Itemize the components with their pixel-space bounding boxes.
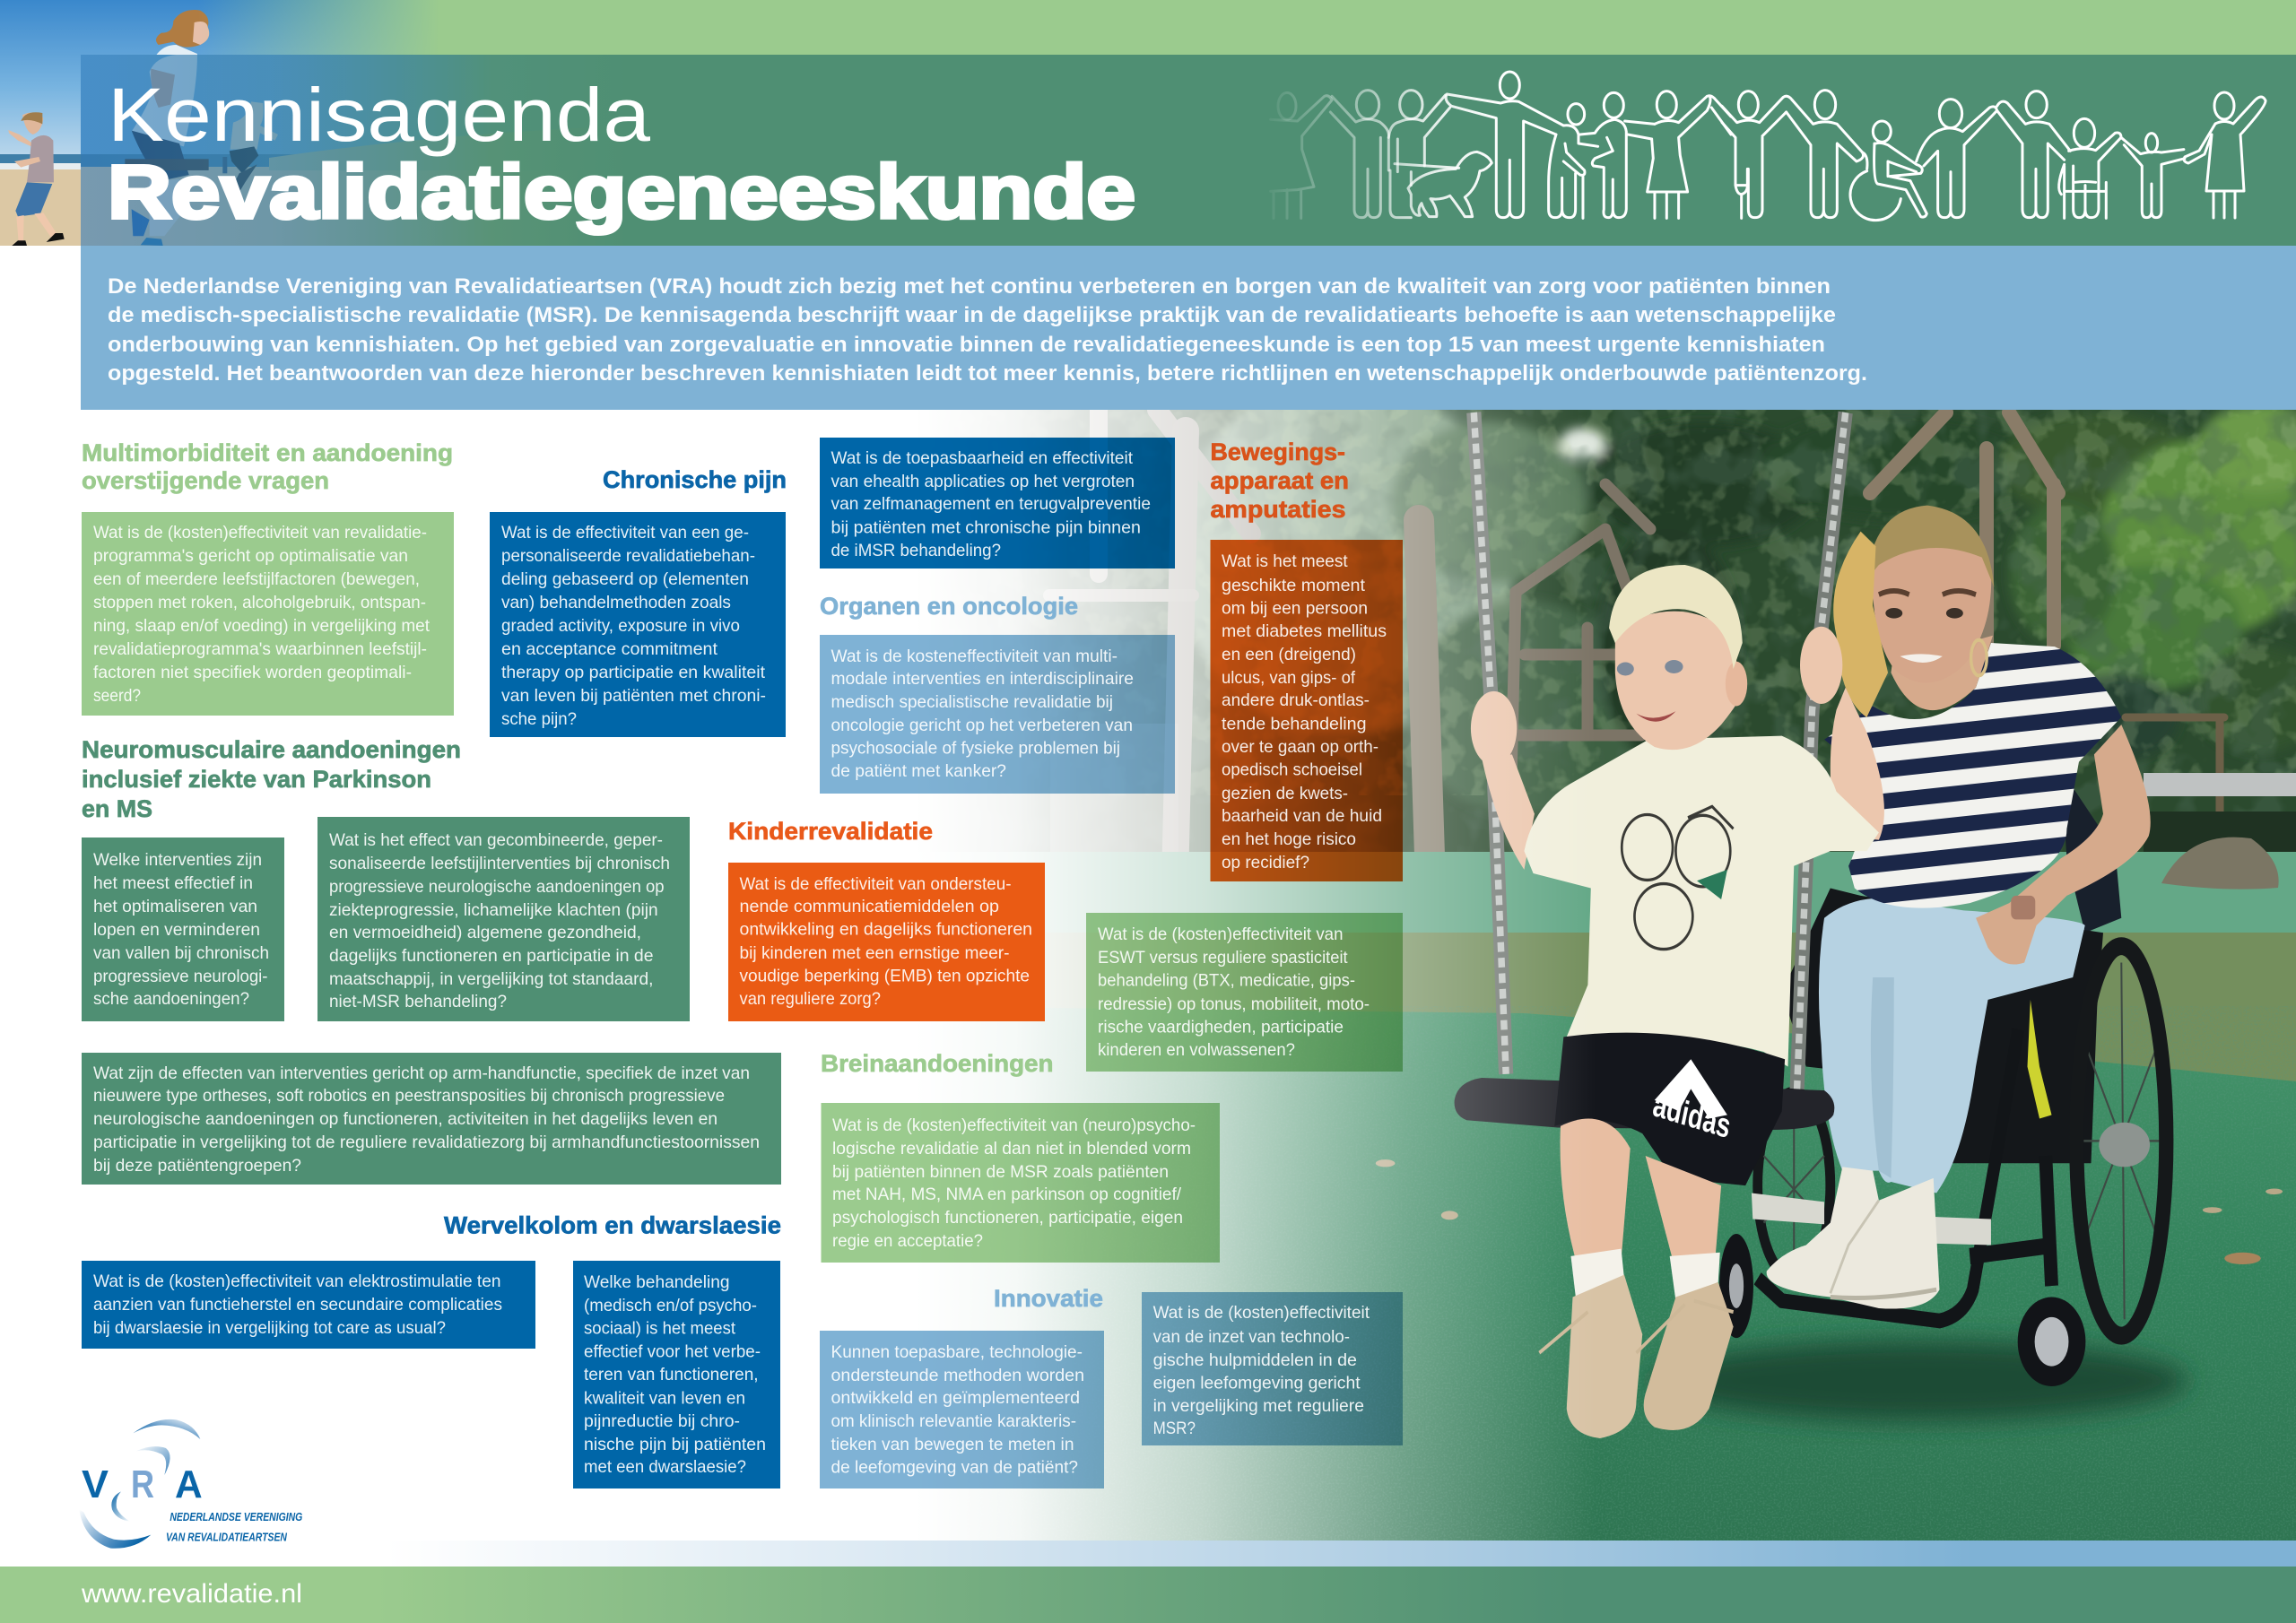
child: adidas [1650, 1087, 1734, 1146]
question box: leefstijlinterventies: niet-MSR behandeling? [329, 992, 507, 1011]
question box: technologische hulpmiddelen [1142, 1292, 1403, 1445]
question box: technologische hulpmiddelen: MSR? [1153, 1419, 1196, 1438]
question box: elektrostimulatie [82, 1261, 535, 1349]
mint strip of play floor [1043, 852, 2296, 933]
intro text panel: De Nederlandse Vereniging van Revalidatieartsen (VRA) houdt zich bezig met het continu verbeteren en borgen van de kwaliteit van zorg voor patiënten binnen [108, 274, 1831, 299]
question box: voudige beperking (EMB) ten opzichte [739, 967, 1030, 986]
header title panel [81, 55, 2296, 246]
question box: elektrostimulatie: bij dwarslaesie in vergelijking tot care as usual? [93, 1318, 446, 1338]
question box: ESWT: redressie) op tonus, mobiliteit, moto- [1098, 994, 1370, 1014]
question box: oncologie gericht op het verbeteren van [831, 716, 1133, 735]
question box: een of meerdere leefstijlfactoren (bewegen, [93, 569, 420, 589]
question box: gepersonaliseerde behandeling: en acceptance commitment [501, 639, 718, 659]
logo: VRA: V [82, 1463, 109, 1506]
stair structure below beam [1074, 724, 1165, 852]
question box: van reguliere zorg? [739, 989, 881, 1009]
question box: nende communicatiemiddelen op [739, 897, 999, 916]
wheelchair [1719, 769, 2166, 1386]
question box: gepersonaliseerde behandeling: sche pijn? [501, 709, 577, 729]
background trees [993, 410, 2296, 852]
heading: Bewegingsapparaat en amputaties: apparaat en [1211, 467, 1349, 494]
question box: behandeling dwarslaesie: pijnreductie bij chro- [584, 1411, 740, 1431]
panel: Bewegingsapparaat en amputaties [1211, 438, 1403, 881]
question box: gepersonaliseerde behandeling: Wat is de effectiviteit van een ge- [501, 523, 749, 542]
question box: arm-handfunctie: bij deze patiëntengroepen? [93, 1156, 301, 1176]
photo: child on swing and woman in wheelchair [897, 377, 2296, 1541]
question box: Wat is het meest [1222, 551, 1348, 571]
green play floor [897, 1006, 2296, 1541]
logo: VRA: VAN REVALIDATIEARTSEN [166, 1531, 288, 1543]
header beach photo [0, 0, 420, 246]
panel: Innovatie [820, 1285, 1403, 1488]
question box: over te gaan op orth- [1222, 737, 1378, 757]
question box: lopen en vallen: lopen en verminderen [93, 920, 260, 940]
question box: neuropsychologische revalidatie: bij patiënten binnen de MSR zoals patiënten [832, 1162, 1169, 1182]
question box: andere druk-ontlas- [1222, 690, 1370, 710]
icon: row of people holding hands [1271, 72, 2266, 221]
question box: lopen en vallen [82, 838, 284, 1021]
question box: ehealth [820, 438, 1175, 568]
question box: technologische hulpmiddelen: gische hulpmiddelen in de [1153, 1350, 1357, 1370]
question box: lopen en vallen: sche aandoeningen? [93, 989, 249, 1009]
question box: stoppen met roken, alcoholgebruik, ontspan- [93, 593, 426, 612]
intro text panel [81, 246, 2296, 410]
question box [820, 635, 1175, 794]
question box: factoren niet specifiek worden geoptimali- [93, 663, 412, 682]
question box: behandeling dwarslaesie: met een dwarslaesie? [584, 1457, 746, 1477]
footer band [0, 1567, 2296, 1623]
question box: behandeling dwarslaesie: sociaal) is het meest [584, 1318, 736, 1338]
question box: behandeling dwarslaesie: effectief voor het verbe- [584, 1342, 761, 1362]
intro text panel: opgesteld. Het beantwoorden van deze hieronder beschreven kennishiaten leidt tot meer kennis, betere richtlijnen en wetenschappelijk onderbouwde patiëntenzorg. [108, 361, 1867, 386]
heading: Neuromusculaire aandoeningen [82, 736, 461, 822]
panel: Kinderrevalidatie [728, 818, 1045, 1021]
question box: neuropsychologische revalidatie: regie en acceptatie? [832, 1231, 983, 1251]
question box: leefstijlinterventies: en vermoeidheid) algemene gezondheid, [329, 923, 641, 942]
question box: seerd? [93, 686, 141, 706]
heading: Multimorbiditeit [82, 439, 453, 494]
top colour band [0, 0, 2296, 55]
question box: leefstijlinterventies: progressieve neurologische aandoeningen op [329, 877, 665, 897]
question box: leefstijlinterventies: maatschappij, in vergelijking tot standaard, [329, 969, 653, 989]
question box: ESWT: Wat is de (kosten)effectiviteit van [1098, 924, 1344, 944]
question box: op recidief? [1222, 853, 1309, 872]
left fade of photo [897, 410, 1596, 1541]
question box: ESWT: kinderen en volwassenen? [1098, 1040, 1295, 1060]
question box: lopen en vallen: het optimaliseren van [93, 897, 257, 916]
question box: gepersonaliseerde behandeling: graded activity, exposure in vivo [501, 616, 740, 636]
question box: arm-handfunctie [82, 1053, 781, 1185]
heading: Organen en oncologie: Organen en oncologie [820, 593, 1078, 620]
question box: gepersonaliseerde behandeling: van leven bij patiënten met chroni- [501, 686, 766, 706]
question box: modale interventies en interdisciplinaire [831, 669, 1134, 689]
question box: ehealth: Wat is de toepasbaarheid en effectiviteit [831, 448, 1134, 468]
panel: Multimorbiditeit [82, 439, 454, 716]
question box: behandeling dwarslaesie: (medisch en/of psycho- [584, 1296, 757, 1315]
playground wood structures [1049, 410, 2224, 883]
question box: arm-handfunctie: Wat zijn de effecten van interventies gericht op arm-handfunctie, specifiek de inzet van [93, 1063, 750, 1083]
question box: neuropsychologische revalidatie: psychologisch functioneren, participatie, eigen [832, 1208, 1183, 1228]
question box: gepersonaliseerde behandeling: therapy op participatie en kwaliteit [501, 663, 766, 682]
title: Revalidatiegeneeskunde [108, 150, 1135, 234]
question box: lopen en vallen: Welke interventies zijn [93, 850, 262, 870]
question box: baarheid van de huid [1222, 806, 1382, 826]
question box: lopen en vallen: progressieve neurologi- [93, 967, 267, 986]
question box: technologische hulpmiddelen: Wat is de (kosten)effectiviteit [1153, 1303, 1370, 1323]
boulder [2161, 838, 2279, 890]
logo: VRA: A [175, 1463, 203, 1506]
footer url: www.revalidatie.nl [81, 1579, 302, 1609]
question box: ontwikkeling en dagelijks functioneren [739, 920, 1032, 940]
floor speckle [1388, 1006, 2296, 1541]
child [1471, 565, 1884, 1438]
question box: arm-handfunctie: participatie in vergelijking tot de reguliere revalidatiezorg bij armhandfunctiestoornissen [93, 1133, 760, 1152]
question box: leefstijlinterventies: sonaliseerde leefstijlinterventies bij chronisch [329, 854, 670, 873]
question box: behandeling dwarslaesie: kwaliteit van leven en [584, 1388, 745, 1408]
question box: neuropsychologische revalidatie: met NAH, MS, NMA en parkinson op cognitief/ [832, 1185, 1182, 1204]
question box: technologische hulpmiddelen: eigen leefomgeving gericht [1153, 1374, 1361, 1393]
question box: lopen en vallen: van vallen bij chronisch [93, 943, 269, 963]
intro text panel: de medisch-specialistische revalidatie (MSR). De kennisagenda beschrijft waar in de dagelijkse praktijk van de revalidatiearts behoefte is aan wetenschappelijke [108, 303, 1836, 327]
question box: elektrostimulatie: aanzien van functieherstel en secundaire complicaties [93, 1295, 502, 1315]
woman [1767, 506, 2151, 1309]
question box: bij kinderen met een ernstige meer- [739, 943, 1010, 963]
question box: neuropsychologische revalidatie: logische revalidatie al dan niet in blended vorm [832, 1139, 1191, 1159]
panel: Wervelkolom en dwarslaesie [82, 1212, 781, 1488]
question box: arm-handfunctie: nieuwere type ortheses, soft robotics en peestransposities bij chronisch progressieve [93, 1086, 725, 1106]
heading: Breinaandoeningen: Breinaandoeningen [821, 1050, 1053, 1077]
question box: behandeling dwarslaesie: teren van functioneren, [584, 1365, 759, 1384]
heading: Neuromusculaire aandoeningen: inclusief ziekte van Parkinson [82, 766, 431, 793]
question box [1211, 540, 1403, 881]
question box: gezien de kwets- [1222, 784, 1348, 803]
car and hedge [2144, 773, 2296, 852]
question box: programma's gericht op optimalisatie van [93, 546, 408, 566]
question box: en het hoge risico [1222, 829, 1356, 849]
question box: technologische hulpmiddelen: in vergelijking met reguliere [1153, 1396, 1364, 1416]
logo: VRA [79, 1419, 302, 1549]
question box: gepersonaliseerde behandeling: deling gebaseerd op (elementen [501, 569, 749, 589]
question box: gepersonaliseerde behandeling [490, 512, 786, 737]
question box: en een (dreigend) [1222, 645, 1356, 664]
question box: om bij een persoon [1222, 599, 1368, 619]
question box: opedisch schoeisel [1222, 760, 1362, 780]
swing chains [1474, 412, 1846, 1089]
question box: technologie-ondersteunde methoden: de leefomgeving van de patiënt? [831, 1458, 1078, 1478]
question box: leefstijlinterventies: dagelijks functioneren en participatie in de [329, 946, 653, 966]
question box: behandeling dwarslaesie: nische pijn bij patiënten [584, 1435, 766, 1454]
heading: Innovatie: Innovatie [994, 1285, 1103, 1312]
heading: Bewegingsapparaat en amputaties [1211, 438, 1349, 523]
question box: met diabetes mellitus [1222, 621, 1387, 641]
question box [82, 512, 454, 716]
panel: Neuromusculaire aandoeningen [82, 736, 781, 1185]
question box: ehealth: bij patiënten met chronische pijn binnen [831, 518, 1141, 538]
shadow under wheelchair [1650, 1341, 2188, 1421]
heading: Multimorbiditeit: Multimorbiditeit en aandoening [82, 439, 453, 466]
question box: Wat is de (kosten)effectiviteit van revalidatie- [93, 523, 427, 542]
question box: elektrostimulatie: Wat is de (kosten)effectiviteit van elektrostimulatie ten [93, 1271, 500, 1291]
question box: technologie-ondersteunde methoden: tieken van bewegen te meten in [831, 1435, 1074, 1454]
question box: medisch specialistische revalidatie bij [831, 692, 1113, 712]
heading: Bewegingsapparaat en amputaties: amputaties [1211, 496, 1345, 523]
question box: leefstijlinterventies [317, 817, 690, 1021]
logo: VRA: NEDERLANDSE VERENIGING [170, 1511, 302, 1523]
question box: technologische hulpmiddelen: van de inzet van technolo- [1153, 1327, 1350, 1347]
question box: neuropsychologische revalidatie [822, 1103, 1220, 1263]
question box: leefstijlinterventies: Wat is het effect van gecombineerde, geper- [329, 830, 663, 850]
question box: neuropsychologische revalidatie: Wat is de (kosten)effectiviteit van (neuro)psycho- [832, 1115, 1196, 1135]
question box: Wat is de effectiviteit van ondersteu- [739, 874, 1012, 894]
question box: de patiënt met kanker? [831, 761, 1006, 781]
question box: ehealth: de iMSR behandeling? [831, 541, 1001, 560]
question box: technologie-ondersteunde methoden [820, 1331, 1104, 1488]
question box: ulcus, van gips- of [1222, 668, 1356, 688]
question box: ehealth: van ehealth applicaties op het vergroten [831, 472, 1135, 491]
question box: leefstijlinterventies: ziekteprogressie, lichamelijke klachten (pijn [329, 900, 658, 920]
question box: arm-handfunctie: neurologische aandoeningen op functioneren, activiteiten in het dagelijks leven en [93, 1109, 718, 1129]
question box: gepersonaliseerde behandeling: van) behandelmethoden zoals [501, 593, 731, 612]
question box: tende behandeling [1222, 714, 1367, 733]
question box: Wat is de kosteneffectiviteit van multi- [831, 647, 1118, 666]
grass [1045, 933, 2296, 1081]
title [108, 73, 1135, 234]
question box: ESWT: behandeling (BTX, medicatie, gips- [1098, 971, 1355, 991]
heading: Chronische pijn: Chronische pijn [603, 466, 787, 493]
question box: revalidatieprogramma's waarbinnen leefstijl- [93, 639, 427, 659]
question box: technologie-ondersteunde methoden: ondersteunde methoden worden [831, 1366, 1084, 1385]
question box: psychosociale of fysieke problemen bij [831, 739, 1120, 759]
leaves on floor [1376, 1159, 2283, 1264]
logo: VRA: R [131, 1463, 154, 1506]
question box: behandeling dwarslaesie [573, 1261, 780, 1488]
question box: technologie-ondersteunde methoden: ontwikkeld en geïmplementeerd [831, 1388, 1080, 1408]
question box [728, 863, 1045, 1021]
heading: Multimorbiditeit: overstijgende vragen [82, 467, 329, 494]
bottom light blue band [386, 1541, 2296, 1567]
question box: ESWT: rische vaardigheden, participatie [1098, 1017, 1344, 1037]
heading: Neuromusculaire aandoeningen: en MS [82, 795, 152, 822]
question box: behandeling dwarslaesie: Welke behandeling [584, 1272, 730, 1292]
panel: Breinaandoeningen [821, 913, 1403, 1263]
question box: technologie-ondersteunde methoden: Kunnen toepasbare, technologie- [831, 1342, 1083, 1362]
heading: Kinderrevalidatie: Kinderrevalidatie [728, 818, 933, 845]
panel: Chronische pijn [490, 438, 1175, 737]
panel: Organen en oncologie [820, 593, 1175, 794]
swing seat [1455, 1078, 1834, 1130]
question box: technologie-ondersteunde methoden: om klinisch relevantie karakteris- [831, 1411, 1076, 1431]
question box: geschikte moment [1222, 576, 1366, 595]
title: Kennisagenda [108, 73, 650, 157]
question box: ning, slaap en/of voeding) in vergelijking met [93, 616, 430, 636]
heading: Neuromusculaire aandoeningen: Neuromusculaire aandoeningen [82, 736, 461, 763]
heading: Bewegingsapparaat en amputaties: Bewegings- [1211, 438, 1345, 465]
question box: lopen en vallen: het meest effectief in [93, 873, 253, 893]
question box: ESWT: ESWT versus reguliere spasticiteit [1098, 948, 1348, 968]
question box: ESWT [1086, 913, 1403, 1072]
question box: gepersonaliseerde behandeling: personaliseerde revalidatiebehan- [501, 546, 755, 566]
intro text panel: onderbouwing van kennishiaten. Op het gebied van zorgevaluatie en innovatie binnen de revalidatiegeneeskunde is een top 15 van meest urgente kennishiaten [108, 333, 1825, 357]
heading: Wervelkolom en dwarslaesie: Wervelkolom en dwarslaesie [444, 1212, 781, 1239]
question box: ehealth: van zelfmanagement en terugvalpreventie [831, 494, 1151, 514]
